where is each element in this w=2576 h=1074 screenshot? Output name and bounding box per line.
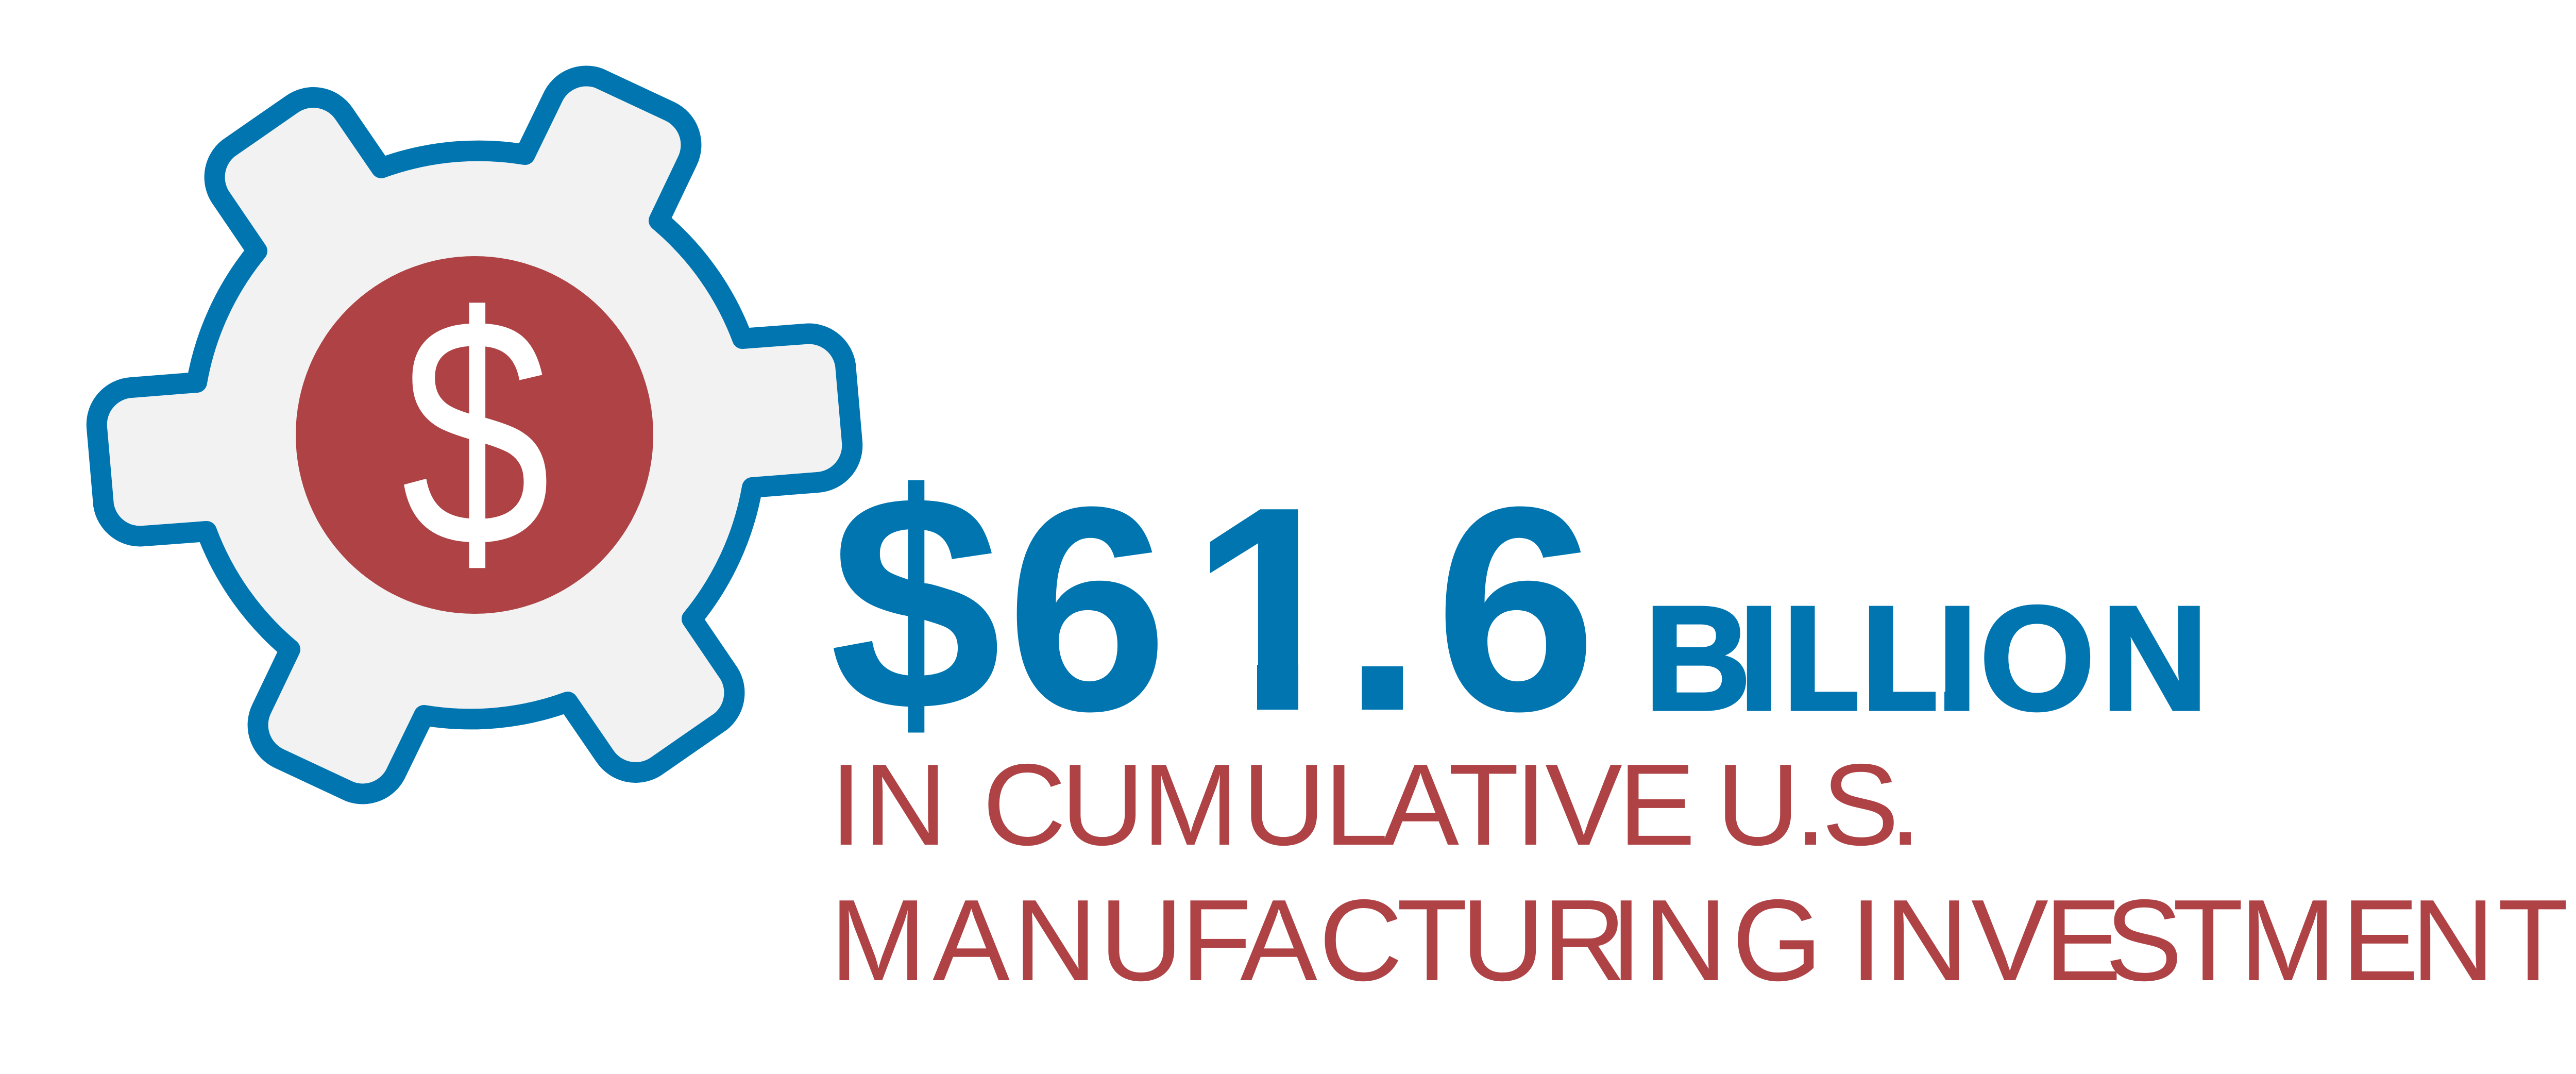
billion label: BILLION — [1644, 575, 2209, 742]
red centre circle — [296, 256, 653, 614]
line: manufacturing investment: MANUFACTURING INVESTMENT — [830, 875, 2568, 1005]
gear body — [97, 76, 852, 794]
icon: gear with dollar sign — [97, 76, 852, 794]
line: in cumulative U.S.: IN CUMULATIVE U.S. — [830, 740, 1922, 869]
subhead text — [830, 740, 2568, 1005]
big figure: $61.6 — [829, 430, 1597, 776]
headline: $61.6 billion — [829, 430, 2209, 776]
dollar sign: $ — [401, 249, 551, 615]
